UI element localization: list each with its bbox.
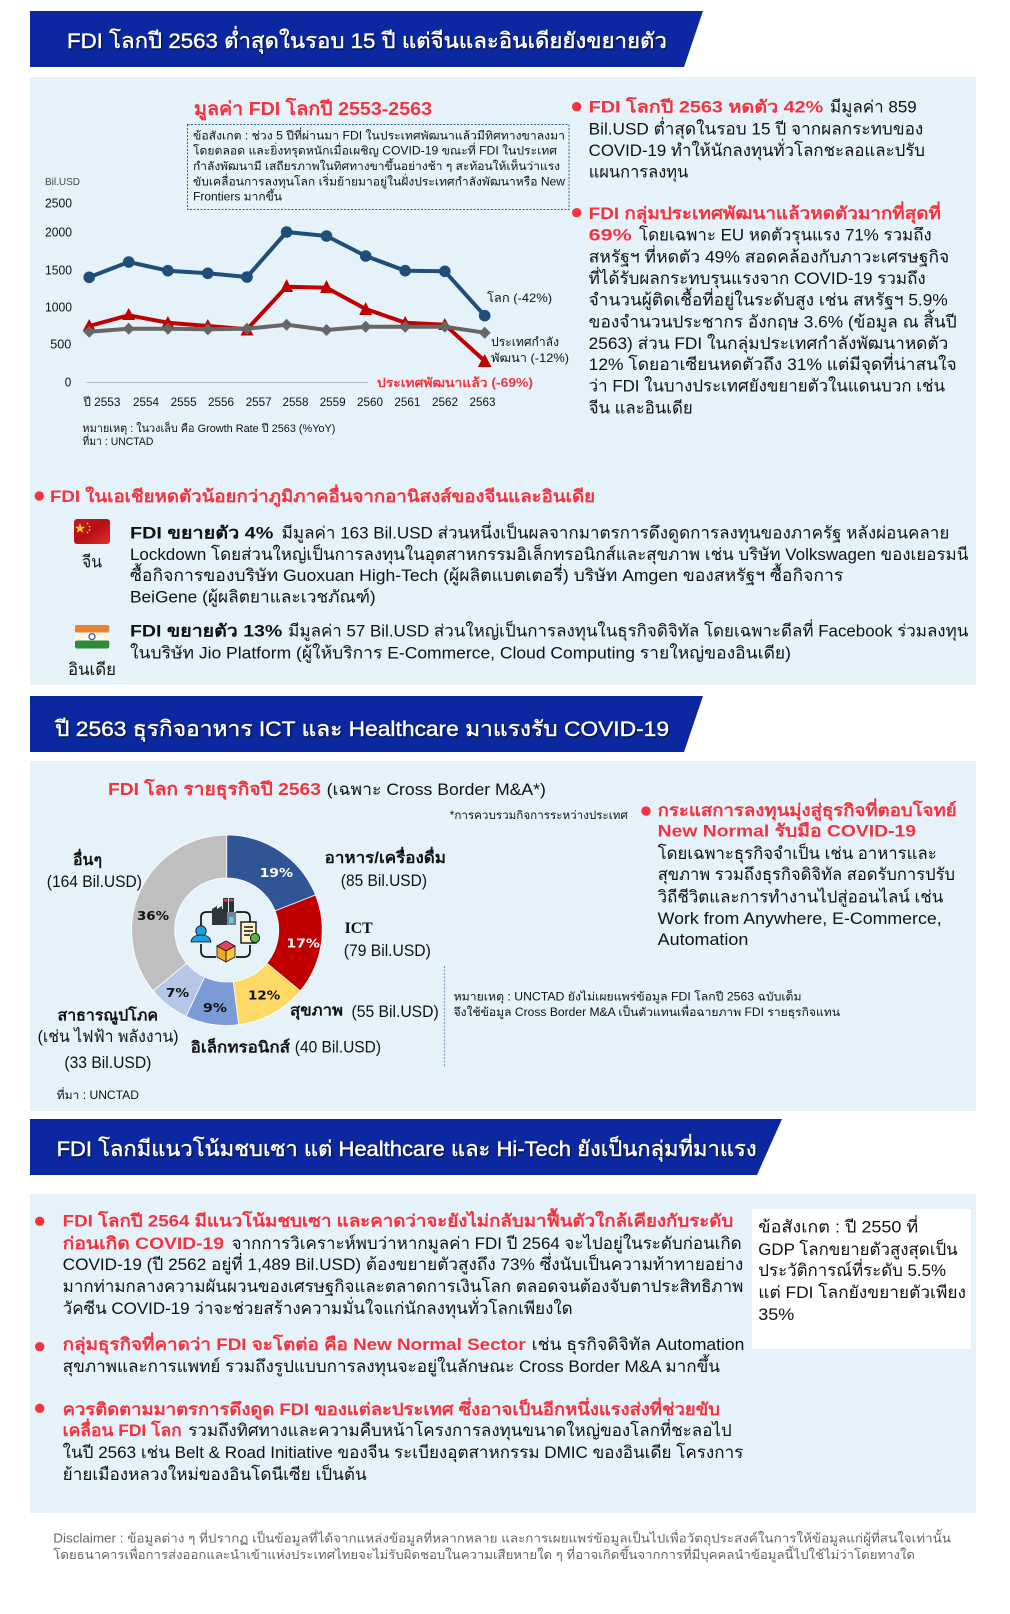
callout: observation note: Frontiers มากขึ้น <box>193 189 282 204</box>
label: food and beverage <box>325 846 446 890</box>
text block: developed economies down 69%: ว่า FDI ในบางประเทศยังขยายตัวในแดนบวก เช่น <box>589 376 946 396</box>
note: UNCTAD data: หมายเหตุ : UNCTAD ยังไม่เผยแพร่ข้อมูล FDI โลกปี 2563 ฉบับเต็ม <box>454 989 802 1004</box>
text block: new normal sectors: Automation <box>658 930 748 949</box>
text block: new normal sectors: New Normal รับมือ COVID-19 <box>658 821 916 841</box>
text block: new normal sectors <box>641 798 957 949</box>
donut percentage labels: 7% <box>166 985 190 1000</box>
label: healthcare: (55 Bil.USD) <box>352 1003 439 1021</box>
line chart: FDI 2553-2563: 500 <box>50 337 71 351</box>
callout: GDP 2550 note: ข้อสังเกต : ปี 2550 ที่ <box>758 1215 918 1237</box>
x axis labels: 2557 <box>246 395 272 409</box>
heading: Asia FDI: FDI ในเอเชียหดตัวน้อยกว่าภูมิภาคอื่นจากอานิสงส์ของจีนและอินเดีย <box>50 484 595 508</box>
header: section 1: FDI โลกปี 2563 ต่ำสุดในรอบ 15 ปี แต่จีนและอินเดียยังขยายตัว <box>67 26 667 54</box>
text block: FDI 2564 outlook: มากท่ามกลางความผันผวนของเศรษฐกิจและตลาดการเงินโลก ตลอดจนต้องจับตาประสิทธิภาพ <box>63 1276 743 1296</box>
text block: developed economies down 69% <box>572 201 957 417</box>
callout: observation note: ขับเคลื่อนการลงทุนโลก เริ่มย้ายมาอยู่ในฝั่งประเทศกำลังพัฒนาหรือ New <box>193 174 566 189</box>
text block: developed economies down 69%: 2563) ส่วน FDI ในกลุ่มประเทศกำลังพัฒนาหดตัว <box>589 333 948 354</box>
donut percentage labels: 9% <box>203 1000 228 1015</box>
donut percentage labels: 36% <box>137 908 170 923</box>
line chart: FDI 2553-2563: Bil.USD <box>45 176 80 188</box>
series labels <box>377 291 569 390</box>
x axis labels: 2562 <box>432 395 458 409</box>
label: others: อื่นๆ <box>73 848 102 869</box>
label: healthcare: สุขภาพ <box>290 1003 343 1021</box>
text block: new normal sectors: โดยเฉพาะธุรกิจจำเป็น เช่น อาหารและ <box>658 843 937 864</box>
text block: developed economies down 69%: จำนวนผู้ติดเชื้อที่อยู่ในระดับสูง เช่น สหรัฐฯ 5.9% <box>589 288 948 311</box>
text block: global FDI down 42%: แผนการลงทุน <box>589 163 689 183</box>
chart title <box>108 778 546 800</box>
text block: China: มีมูลค่า 163 Bil.USD ส่วนหนึ่งเป็นผลจากมาตรการดึงดูดการลงทุนของภาครัฐ หลังผ่อนคลาย <box>282 520 949 543</box>
chart footnote: ที่มา : UNCTAD <box>82 433 153 448</box>
donut chart: FDI by sector <box>132 835 322 1025</box>
x axis labels: 2555 <box>171 395 197 409</box>
text block: developed economies down 69%: 12% โดยอาเซียนหดตัวถึง 31% แต่มีจุดที่น่าสนใจ <box>589 352 957 375</box>
series labels: ประเทศกำลัง <box>491 335 559 349</box>
text block: FDI 2564 outlook: วัคซีน COVID-19 ว่าจะช่วยสร้างความมั่นใจแก่นักลงทุนทั่วโลกเพียงใด <box>63 1296 573 1319</box>
text block: developed economies down 69%: ของจำนวนประชากร อังกฤษ 3.6% (ข้อมูล ณ สิ้นปี <box>589 309 957 332</box>
header: section 1 <box>30 11 703 67</box>
callout: observation note <box>188 124 569 210</box>
text block: policy watch <box>35 1397 743 1484</box>
donut percentage labels: 17% <box>286 936 321 951</box>
text block: policy watch: ควรติดตามมาตรการดึงดูด FDI ของแต่ละประเทศ ซึ่งอาจเป็นอีกหนึ่งแรงส่งที่ช่วยขับ <box>63 1397 720 1421</box>
text block: new normal sector growth: กลุ่มธุรกิจที่คาดว่า FDI จะโตต่อ คือ New Normal Sector <box>63 1332 526 1355</box>
x axis labels: 2554 <box>133 395 159 409</box>
icon: business cycle <box>191 898 260 962</box>
label: utilities: (33 Bil.USD) <box>64 1054 151 1072</box>
text block: China: BeiGene (ผู้ผลิตยาและเวชภัณฑ์) <box>130 587 376 607</box>
callout: GDP 2550 note: แต่ FDI โลกยังขยายตัวเพียง <box>758 1282 966 1302</box>
text block: policy watch: รวมถึงทิศทางและความคืบหน้าโครงการลงทุนขนาดใหญ่ของโลกที่ชะลอไป <box>188 1418 732 1441</box>
text block: developed economies down 69%: ที่ได้รับผลกระทบรุนแรงจาก COVID-19 รวมถึง <box>589 266 926 289</box>
text block: global FDI down 42%: FDI โลกปี 2563 หดตัว 42% <box>589 97 823 117</box>
text block: India <box>130 619 969 663</box>
text block: developed economies down 69%: จีน และอินเดีย <box>589 398 693 417</box>
donut percentage labels: 12% <box>248 987 281 1002</box>
chart title: (เฉพาะ Cross Border M&A*) <box>327 780 546 799</box>
header: section 2 <box>30 696 703 752</box>
series labels: โลก (-42%) <box>487 291 552 305</box>
donut percentage labels <box>137 865 321 1015</box>
text block: developed economies down 69%: โดยเฉพาะ EU หดตัวรุนแรง 71% รวมถึง <box>639 225 932 246</box>
label: utilities: (เช่น ไฟฟ้า พลังงาน) <box>38 1027 179 1046</box>
text block: new normal sectors: กระแสการลงทุนมุ่งสู่ธุรกิจที่ตอบโจทย์ <box>658 798 957 822</box>
label: ICT: (79 Bil.USD) <box>344 942 431 960</box>
text block: China: ซื้อกิจการของบริษัท Guoxuan High-Tech (ผู้ผลิตแบตเตอรี่) บริษัท Amgen ของสหรัฐฯ ซื้อกิจการ <box>130 563 843 586</box>
header: section 3 <box>30 1119 782 1175</box>
series labels: พัฒนา (-12%) <box>491 351 569 365</box>
text block: FDI 2564 outlook: ก่อนเกิด COVID-19 <box>63 1234 224 1253</box>
line chart: FDI 2553-2563 <box>45 176 569 409</box>
x axis labels <box>83 395 496 409</box>
text block: global FDI down 42%: Bil.USD ต่ำสุดในรอบ 15 ปี จากผลกระทบของ <box>589 116 923 139</box>
label: food and beverage: (85 Bil.USD) <box>341 872 427 890</box>
text block: developed economies down 69%: FDI กลุ่มประเทศพัฒนาแล้วหดตัวมากที่สุดที่ <box>589 201 941 224</box>
callout: GDP 2550 note: GDP โลกขยายตัวสูงสุดเป็น <box>758 1239 958 1260</box>
line chart: FDI 2553-2563: 2500 <box>45 196 72 210</box>
chart title: มูลค่า FDI โลกปี 2553-2563 <box>194 97 432 121</box>
label: electronics: (40 Bil.USD) <box>295 1039 381 1057</box>
label: ICT <box>344 920 431 960</box>
line chart: FDI 2553-2563: 1000 <box>45 301 72 315</box>
panel: global FDI 2020 <box>30 77 976 685</box>
callout: GDP 2550 note: ประวัติการณ์ที่ระดับ 5.5% <box>758 1258 946 1280</box>
text block: policy watch: ในปี 2563 เช่น Belt & Road Initiative ของจีน ระเบียงอุตสาหกรรม DMIC ของอินเดีย โครงการ <box>63 1442 743 1463</box>
text block: developed economies down 69%: สหรัฐฯ ที่หดตัว 49% สอดคล้องกับภาวะเศรษฐกิจ <box>589 244 949 266</box>
chart footnote <box>82 421 335 448</box>
chart source: ที่มา : UNCTAD <box>57 1087 139 1102</box>
text block: global FDI down 42%: COVID-19 ทำให้นักลงทุนทั่วโลกชะลอและปรับ <box>589 138 925 161</box>
heading: Asia FDI <box>35 484 595 508</box>
text block: FDI 2564 outlook: จากการวิเคราะห์พบว่าหากมูลค่า FDI ปี 2564 จะไปอยู่ในระดับก่อนเกิด <box>232 1233 742 1254</box>
x axis labels: 2559 <box>320 395 346 409</box>
donut percentage labels: 19% <box>260 865 294 880</box>
text block: new normal sectors: Work from Anywhere, E-Commerce, <box>658 909 942 928</box>
label: others <box>47 848 142 891</box>
text block: policy watch: ย้ายเมืองหลวงใหม่ของอินโดนีเซีย เป็นต้น <box>63 1464 367 1484</box>
label: others: (164 Bil.USD) <box>47 873 142 891</box>
callout: GDP 2550 note <box>752 1209 971 1349</box>
header: section 3: FDI โลกมีแนวโน้มชบเซา แต่ Healthcare และ Hi-Tech ยังเป็นกลุ่มที่มาแรง <box>57 1134 757 1162</box>
line chart: FDI 2553-2563: 0 <box>65 375 71 389</box>
label: ICT: ICT <box>345 920 373 937</box>
callout: observation note: ข้อสังเกต : ช่วง 5 ปีที่ผ่านมา FDI ในประเทศพัฒนาแล้วมีทิศทางขาลงมา <box>193 127 565 142</box>
text block: new normal sectors: สุขภาพ รวมถึงธุรกิจดิจิทัล สอดรับการปรับ <box>658 865 955 885</box>
text block: India: มีมูลค่า 57 Bil.USD ส่วนใหญ่เป็นการลงทุนในธุรกิจดิจิทัล โดยเฉพาะดีลที่ Facebook ร่วมลงทุน <box>288 619 969 642</box>
disclaimer: โดยธนาคารเพื่อการส่งออกและนำเข้าแห่งประเทศไทยจะไม่รับผิดชอบในความเสียหายใด ๆ ที่อาจเกิดขึ้นจากการที่มีบุคคลนำข้อมูลนี้ไปใช้ไม่ว่าโดยทางใด <box>53 1545 915 1563</box>
text block: India: ในบริษัท Jio Platform (ผู้ให้บริการ E-Commerce, Cloud Computing รายใหญ่ของอินเดีย) <box>130 642 791 663</box>
text block: developed economies down 69%: 69% <box>589 226 632 245</box>
x axis labels: 2561 <box>394 395 421 409</box>
disclaimer <box>53 1528 951 1563</box>
text block: FDI 2564 outlook: FDI โลกปี 2564 มีแนวโน้มชบเซา และคาดว่าจะยังไม่กลับมาฟื้นตัวใกล้เคียงกับระดับ <box>63 1208 733 1231</box>
x axis labels: ปี 2553 <box>83 395 121 409</box>
text block: China: FDI ขยายตัว 4% <box>130 523 273 542</box>
label: India: อินเดีย <box>68 660 116 679</box>
text block: China <box>130 520 969 607</box>
x axis labels: 2558 <box>282 395 309 409</box>
text block: China: Lockdown โดยส่วนใหญ่เป็นการลงทุนในอุตสาหกรรมอิเล็กทรอนิกส์และสุขภาพ เช่น บริษัท Volkswagen ของเยอรมนี <box>130 544 969 565</box>
note: UNCTAD data <box>444 966 840 1068</box>
chart footnote: หมายเหตุ : ในวงเล็บ คือ Growth Rate ปี 2563 (%YoY) <box>82 421 335 435</box>
text block: global FDI down 42%: มีมูลค่า 859 <box>830 98 917 118</box>
chart footnote: M&A definition: *การควบรวมกิจการระหว่างประเทศ <box>450 809 629 822</box>
text block: new normal sector growth: เช่น ธุรกิจดิจิทัล Automation <box>532 1335 744 1355</box>
x axis labels: 2563 <box>470 395 496 409</box>
series: world <box>83 226 491 322</box>
label: healthcare <box>290 1003 439 1021</box>
text block: policy watch: เคลื่อน FDI โลก <box>63 1418 182 1440</box>
callout: observation note: กำลังพัฒนามี เสถียรภาพในทิศทางขาขึ้นอย่างช้า ๆ สะท้อนให้เห็นว่าแรง <box>193 158 560 173</box>
line chart: FDI 2553-2563: 1500 <box>45 264 72 278</box>
label: electronics: อิเล็กทรอนิกส์ <box>191 1037 291 1057</box>
text block: global FDI down 42% <box>572 97 925 183</box>
note: UNCTAD data: จึงใช้ข้อมูล Cross Border M&A เป็นตัวแทนเพื่อฉายภาพ FDI รายธุรกิจแทน <box>453 1004 840 1019</box>
x axis labels: 2556 <box>208 395 234 409</box>
callout: observation note: โดยตลอด และยิ่งทรุดหนักเมื่อเผชิญ COVID-19 ขณะที่ FDI ในประเทศ <box>193 142 558 158</box>
label: food and beverage: อาหาร/เครื่องดื่ม <box>325 846 446 867</box>
series labels: ประเทศพัฒนาแล้ว (-69%) <box>377 376 533 390</box>
label: China: จีน <box>82 552 102 571</box>
panel: FDI by sector <box>30 761 976 1111</box>
chart title: FDI โลก รายธุรกิจปี 2563 <box>108 778 321 800</box>
callout: GDP 2550 note: 35% <box>758 1305 794 1324</box>
icon: China flag <box>74 519 110 544</box>
text block: FDI 2564 outlook <box>35 1208 743 1319</box>
line chart: FDI 2553-2563: 2000 <box>45 226 72 240</box>
series: developing economies <box>83 319 491 339</box>
text block: new normal sectors: วิถีชีวิตและการทำงานไปสู่ออนไลน์ เช่น <box>657 886 944 907</box>
text block: new normal sector growth <box>35 1332 744 1377</box>
disclaimer: Disclaimer : ข้อมูลต่าง ๆ ที่ปรากฏ เป็นข้อมูลที่ได้จากแหล่งข้อมูลที่หลากหลาย และการเผยแพร่ข้อมูลเป็นไปเพื่อวัตถุประสงค์ในการให้ข้อมูลแก่ผู้ที่สนใจเท่านั้น <box>53 1528 951 1546</box>
text block: India: FDI ขยายตัว 13% <box>130 622 282 641</box>
header: section 2: ปี 2563 ธุรกิจอาหาร ICT และ Healthcare มาแรงรับ COVID-19 <box>55 717 669 742</box>
label: utilities: สาธารณูปโภค <box>58 1006 158 1027</box>
icon: India flag <box>75 625 109 648</box>
text block: FDI 2564 outlook: COVID-19 (ปี 2562 อยู่ที่ 1,489 Bil.USD) ต้องขยายตัวสูงถึง 73% ซึ่งนับเป็นความท้าทายอย่าง <box>63 1252 743 1275</box>
label: utilities <box>38 1006 179 1072</box>
label: electronics <box>191 1037 381 1057</box>
panel: 2021 outlook <box>30 1194 976 1513</box>
text block: new normal sector growth: สุขภาพและการแพทย์ รวมถึงรูปแบบการลงทุนจะอยู่ในลักษณะ Cross Border M&A มากขึ้น <box>63 1354 721 1377</box>
series: developed economies <box>83 279 491 367</box>
x axis labels: 2560 <box>357 395 383 409</box>
